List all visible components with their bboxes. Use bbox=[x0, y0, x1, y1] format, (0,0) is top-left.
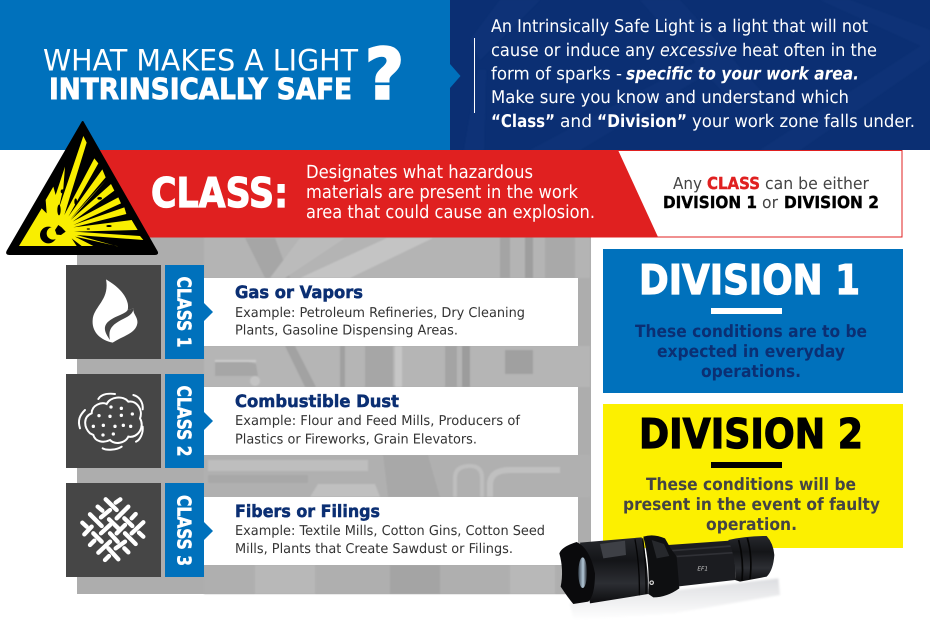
flashlight: EF1 bbox=[697, 566, 708, 572]
text: fibers or filings: Example: Textile Mills, Cotton Gins, Cotton Seed bbox=[235, 523, 545, 539]
class note: CLASS bbox=[707, 174, 760, 193]
text: fibers or filings: Fibers or Filings bbox=[235, 502, 380, 522]
icon: flame bbox=[66, 265, 161, 359]
panel: division 2 bbox=[603, 404, 903, 548]
text: gas or vapors bbox=[235, 283, 525, 338]
tab: class 1: CLASS 1 bbox=[172, 276, 194, 348]
title: WHAT MAKES A LIGHT bbox=[43, 44, 359, 78]
heading: class: CLASS: bbox=[151, 169, 288, 217]
intro text: An Intrinsically Safe Light is a light that will not bbox=[491, 17, 868, 37]
intro text: “Class” bbox=[491, 112, 555, 132]
text: fibers or filings bbox=[235, 502, 545, 557]
text: combustible dust: Combustible Dust bbox=[235, 392, 399, 412]
header: intro panel bbox=[450, 0, 930, 150]
tab: class 1 bbox=[165, 265, 213, 359]
panel: division 1: expected in everyday bbox=[657, 342, 845, 362]
header: left blue panel bbox=[0, 0, 450, 150]
class description bbox=[306, 162, 595, 223]
icon: dust cloud bbox=[66, 374, 161, 468]
panel: division 2: present in the event of faulty bbox=[623, 495, 880, 515]
intro text: your work zone falls under. bbox=[692, 112, 915, 132]
tab: class 2: CLASS 2 bbox=[172, 386, 194, 456]
title: ? bbox=[365, 34, 404, 116]
class note: Any bbox=[673, 174, 702, 193]
intro text bbox=[491, 17, 915, 132]
tab: class 3: CLASS 3 bbox=[172, 495, 194, 566]
intro text: “Division” bbox=[597, 112, 687, 132]
row: class 2 bbox=[66, 374, 578, 468]
tab: class 3 bbox=[165, 483, 213, 577]
text: gas or vapors: Plants, Gasoline Dispensing Areas. bbox=[235, 322, 458, 338]
text: combustible dust: Example: Flour and Feed Mills, Producers of bbox=[235, 413, 521, 429]
intro text: excessive bbox=[660, 41, 737, 61]
panel: division 1: operations. bbox=[701, 362, 801, 382]
row: class 1 bbox=[66, 265, 578, 359]
class note: or bbox=[762, 193, 778, 212]
panel: division 2: DIVISION 2 bbox=[639, 410, 863, 458]
intro text: cause or induce any bbox=[491, 41, 655, 61]
text: gas or vapors: Example: Petroleum Refineries, Dry Cleaning bbox=[235, 305, 525, 321]
panel: industrial photo background bbox=[77, 237, 591, 594]
text: gas or vapors: Gas or Vapors bbox=[235, 283, 363, 303]
title bbox=[43, 34, 404, 116]
class note: DIVISION 2 bbox=[784, 193, 879, 212]
title: INTRINSICALLY SAFE bbox=[49, 72, 352, 106]
text: fibers or filings: Mills, Plants that Create Sawdust or Filings. bbox=[235, 541, 513, 557]
intro text: specific to your work area. bbox=[626, 64, 859, 84]
class note: can be either bbox=[765, 174, 869, 193]
panel: division 1 bbox=[603, 249, 903, 393]
panel: division 2: These conditions will be bbox=[646, 475, 856, 495]
panel: division 2: operation. bbox=[706, 515, 797, 535]
class description: area that could cause an explosion. bbox=[306, 202, 595, 223]
panel: division 1: DIVISION 1 bbox=[639, 256, 860, 304]
text: combustible dust: Plastics or Fireworks, Grain Elevators. bbox=[235, 432, 477, 448]
class description: materials are present in the work bbox=[306, 182, 579, 203]
class note bbox=[663, 174, 879, 212]
text: combustible dust bbox=[235, 392, 521, 448]
panel: division 1: These conditions are to be bbox=[635, 322, 867, 342]
panel: class banner bbox=[100, 150, 902, 237]
intro text: Make sure you know and understand which bbox=[491, 88, 849, 108]
class note: DIVISION 1 bbox=[663, 193, 757, 212]
flashlight bbox=[559, 535, 780, 620]
tab: class 2 bbox=[165, 374, 213, 468]
row: class 3 bbox=[66, 483, 578, 577]
intro text: heat often in the bbox=[742, 41, 877, 61]
icon: explosion warning triangle bbox=[7, 122, 157, 254]
intro text: and bbox=[560, 112, 592, 132]
class description: Designates what hazardous bbox=[306, 162, 533, 183]
intro text: form of sparks - bbox=[491, 64, 622, 84]
icon: woven fibers bbox=[66, 483, 161, 577]
